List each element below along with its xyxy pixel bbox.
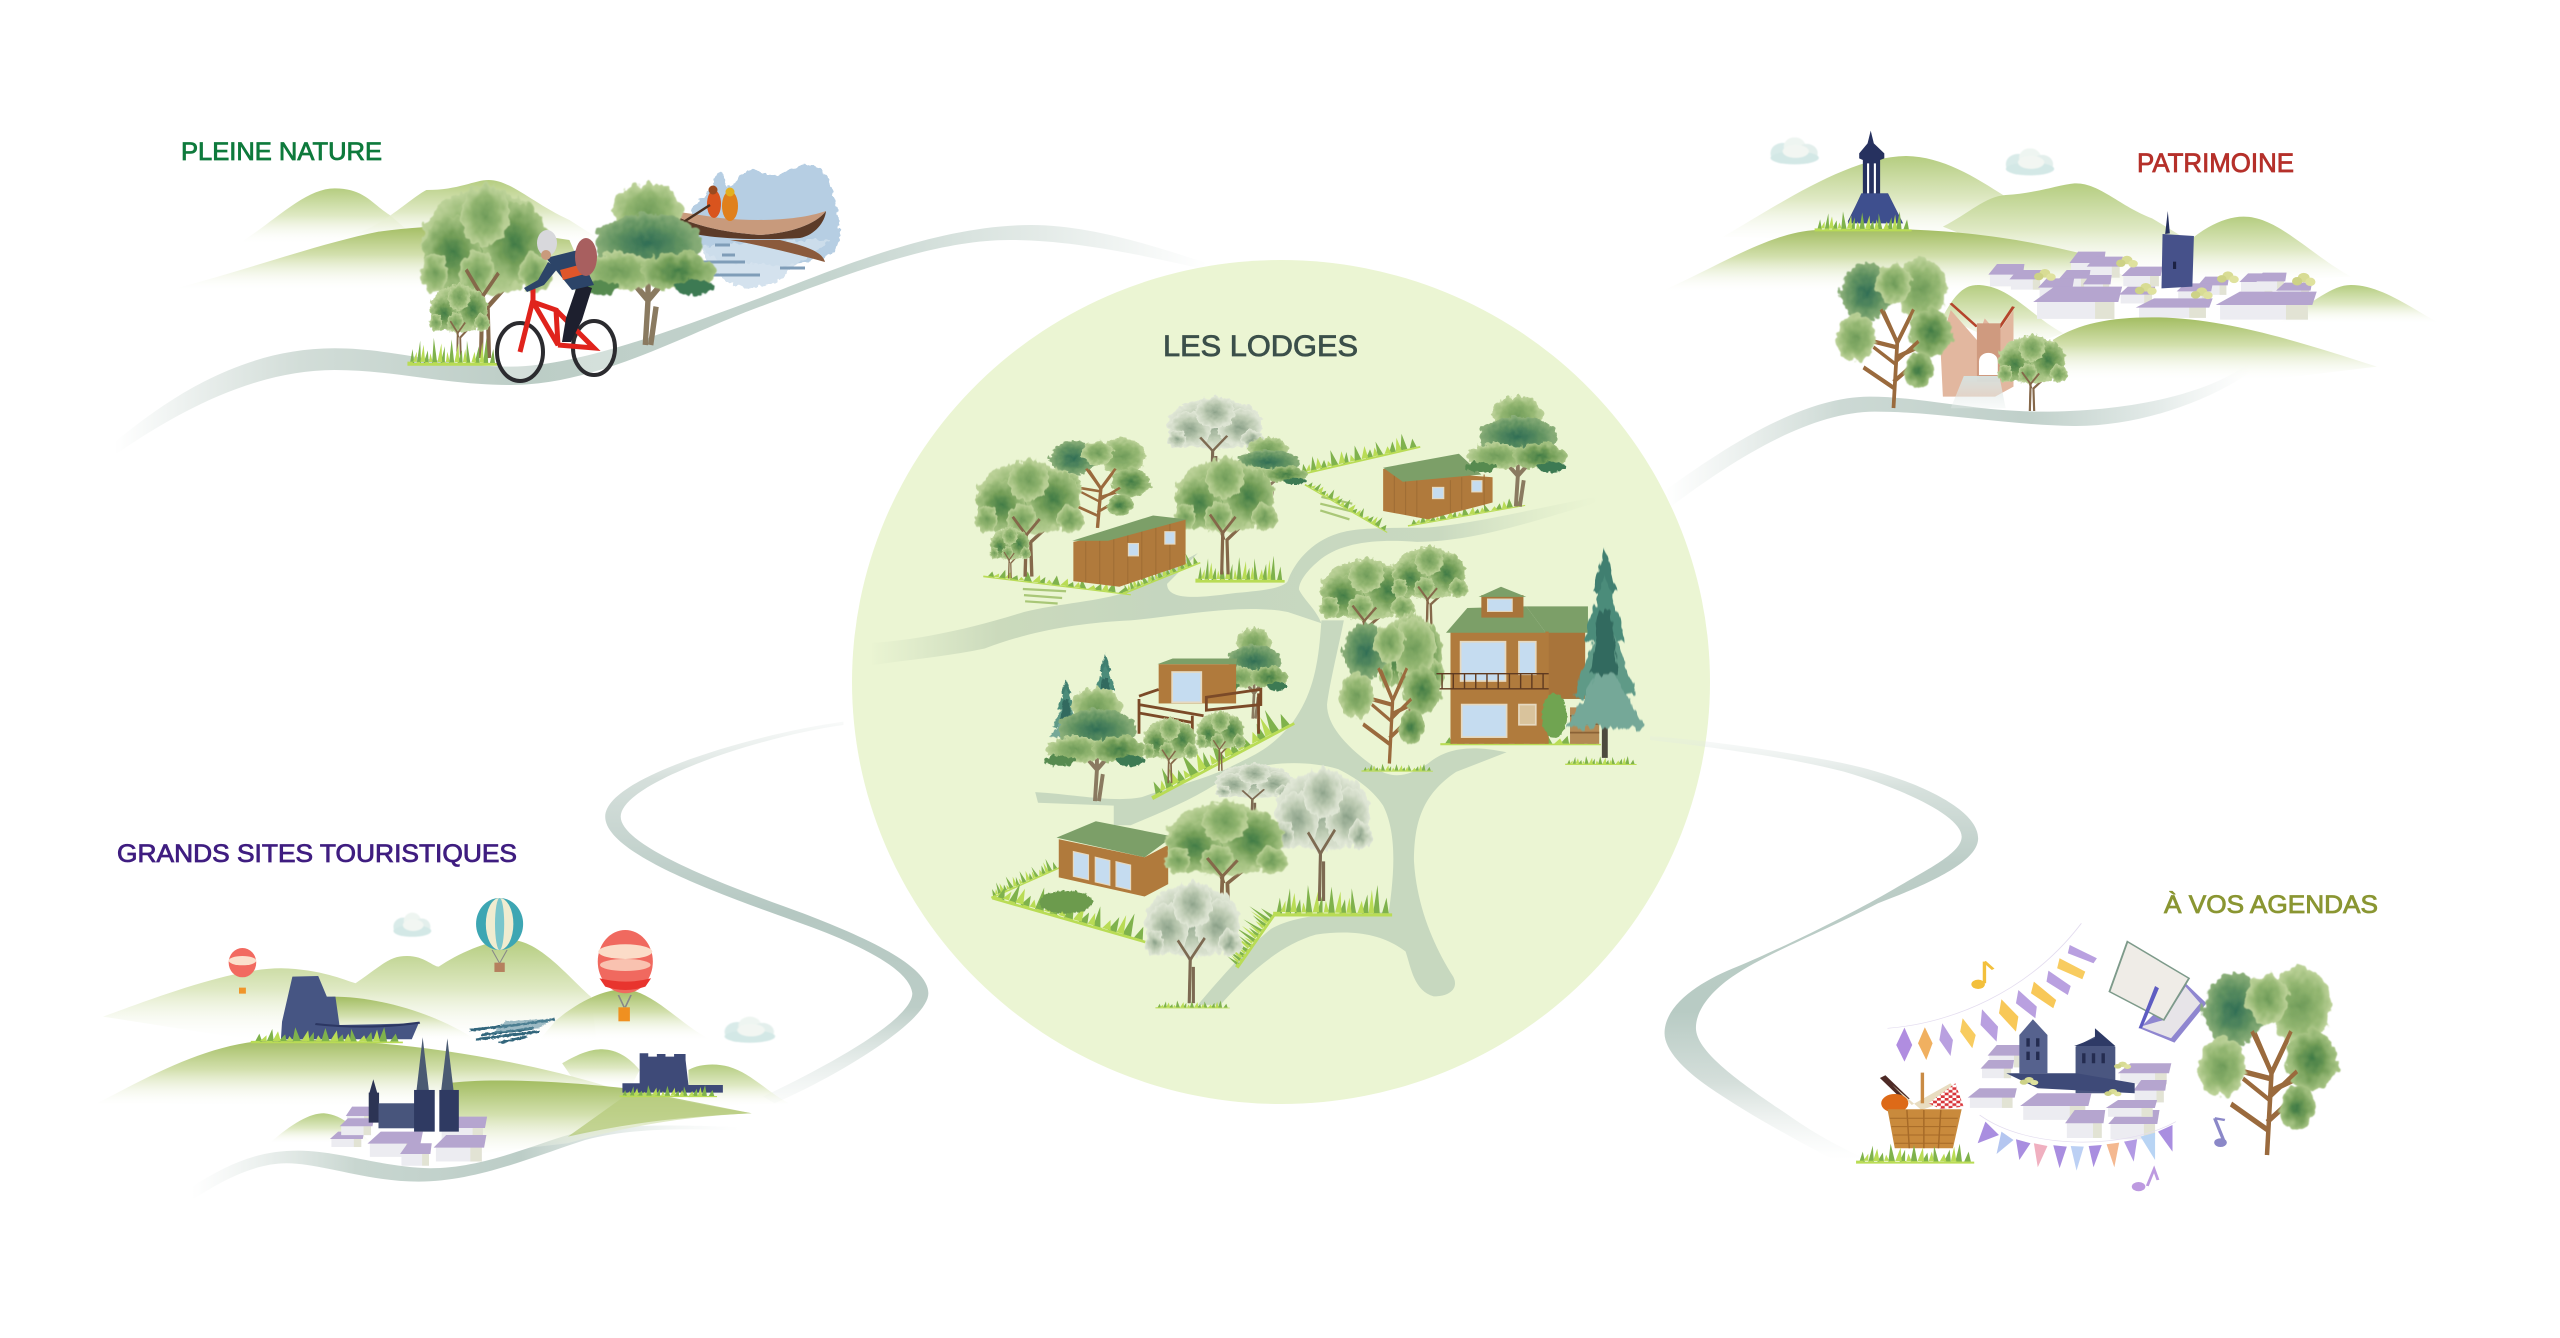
hills xyxy=(97,940,789,1157)
water splash xyxy=(688,165,840,288)
lodges scene xyxy=(872,396,1644,1008)
tower xyxy=(2161,211,2194,288)
tree: large xyxy=(2198,968,2338,1155)
cathedral xyxy=(369,1037,459,1132)
monument xyxy=(1815,131,1912,231)
balloon: small red xyxy=(229,948,256,994)
main house xyxy=(1436,587,1599,744)
tower church xyxy=(1968,1019,2171,1139)
rider xyxy=(562,283,592,342)
music note yellow xyxy=(1984,962,1993,983)
trees and treehouse lodge xyxy=(1045,628,1288,801)
scene xyxy=(1856,923,2227,1191)
trees centre right xyxy=(1319,546,1468,733)
music note dot purple xyxy=(2132,1182,2145,1191)
grass strips xyxy=(983,430,1637,1008)
tall fir xyxy=(1566,547,1644,758)
grass xyxy=(407,338,498,366)
tree: right xyxy=(576,183,716,345)
heading: À VOS AGENDAS xyxy=(2164,890,2378,919)
steps xyxy=(1023,497,1352,604)
shrub xyxy=(1039,891,1093,913)
circle background xyxy=(852,260,1710,1104)
lodge 2 xyxy=(1383,454,1493,519)
back hills xyxy=(1660,156,2440,350)
balloon: teal xyxy=(476,898,523,972)
road: pleine nature xyxy=(113,225,1207,455)
hills xyxy=(170,180,606,290)
road: left branch and upper branch xyxy=(872,497,1596,665)
front hill xyxy=(2053,317,2377,380)
panel: pleine nature xyxy=(170,138,840,381)
olive shrubs xyxy=(2034,256,2315,299)
road: grands sites foreground xyxy=(192,1126,740,1200)
tree: small green xyxy=(1997,334,2067,411)
bike frame xyxy=(520,288,594,352)
trees behind upper cabin xyxy=(975,396,1307,578)
panel: les lodges circle xyxy=(852,260,1710,1104)
balloon: big red xyxy=(598,930,653,1021)
music note purple xyxy=(2147,1169,2158,1186)
castle xyxy=(620,1053,723,1097)
tree: large xyxy=(420,185,551,358)
road: central junction and lower branches xyxy=(1035,620,1507,1005)
music note dot blue xyxy=(2214,1138,2227,1147)
cyclist xyxy=(497,230,615,381)
lodge 1 xyxy=(1072,515,1187,587)
heading: PLEINE NATURE xyxy=(181,138,382,166)
picnic basket xyxy=(1856,1073,1974,1164)
modern building xyxy=(251,976,420,1043)
music note blue xyxy=(2215,1118,2225,1143)
tree: small xyxy=(429,284,489,360)
road: agenda winding xyxy=(1650,736,1978,1160)
road: patrimoine xyxy=(1666,363,2249,507)
scene xyxy=(97,898,789,1166)
castle gate xyxy=(1940,303,2013,408)
upper bunting xyxy=(1888,923,2097,1062)
title: les lodges: LES LODGES xyxy=(1163,330,1358,363)
lodge 4 xyxy=(1057,821,1173,897)
water reflections xyxy=(700,245,805,275)
heading: PATRIMOINE xyxy=(2137,148,2294,178)
village xyxy=(1988,252,2317,320)
lower bunting xyxy=(1978,1115,2176,1171)
lake xyxy=(470,1018,555,1043)
hills and landmarks xyxy=(1660,131,2440,408)
music note dot yellow xyxy=(1971,980,1985,989)
heading: GRANDS SITES TOURISTIQUES xyxy=(117,840,517,868)
tree upper right xyxy=(1466,396,1567,506)
lodge 3 on stilts xyxy=(1139,659,1261,734)
book xyxy=(2109,942,2206,1043)
panel: patrimoine xyxy=(1660,131,2440,411)
clouds xyxy=(393,913,775,1043)
panel: grands sites touristiques xyxy=(97,840,789,1166)
bike wheels xyxy=(497,323,543,381)
tree in front of house xyxy=(1339,619,1441,763)
canoe and paddlers xyxy=(665,186,826,262)
road: grands sites winding xyxy=(605,722,928,1103)
panel: a vos agendas xyxy=(1856,890,2378,1191)
clouds xyxy=(1770,137,2054,175)
village xyxy=(330,1107,487,1166)
tree: olive xyxy=(1836,259,1952,408)
trees bottom xyxy=(1145,763,1371,1003)
